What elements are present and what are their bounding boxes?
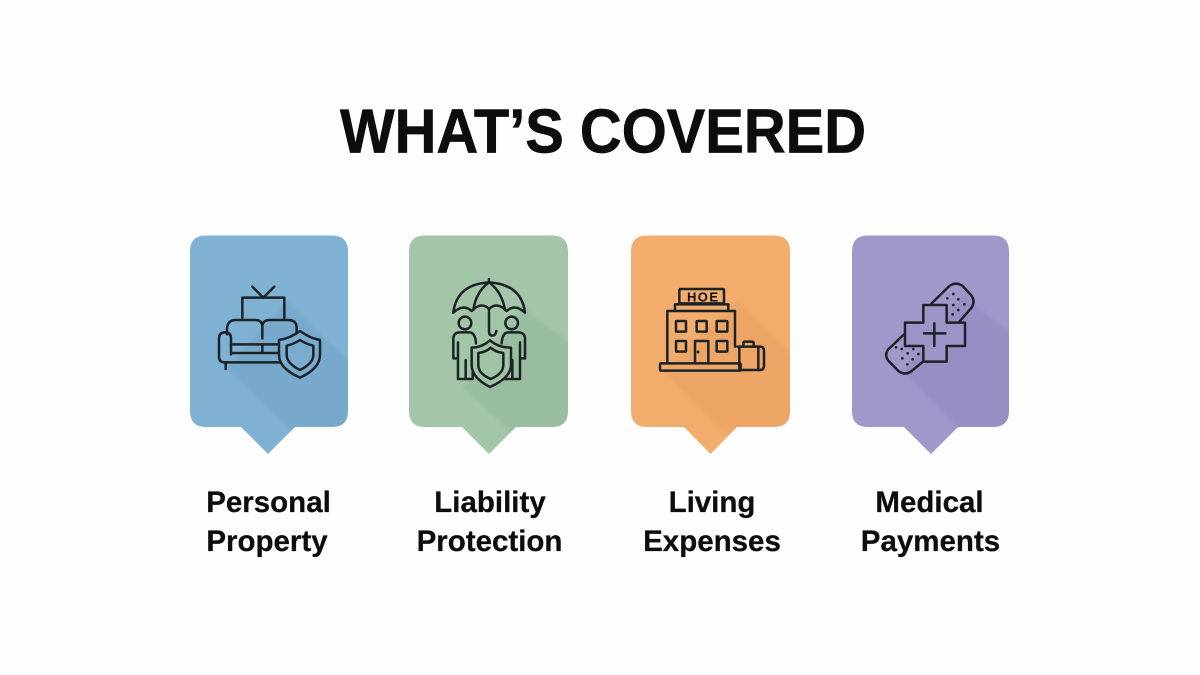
card background: blue [190, 235, 348, 455]
long shadow: green card [466, 312, 568, 430]
card background: purple [852, 235, 1009, 455]
icon: sofa, TV and shield [219, 287, 320, 378]
panel: medical payments [852, 235, 1013, 455]
card background: green [409, 235, 568, 455]
label: personal property: Personal [206, 486, 331, 519]
icon: hotel and suitcase [660, 289, 764, 371]
icon: door knob [696, 350, 700, 354]
label: medical payments: Payments [861, 525, 1000, 558]
long shadow: blue card [231, 306, 348, 429]
long shadow: purple card [907, 300, 1009, 427]
title: WHAT’S COVERED [340, 98, 866, 166]
label: personal property: Property [206, 525, 328, 558]
panel: living expenses [631, 235, 794, 455]
label: living expenses: Expenses [643, 525, 781, 558]
long shadow: orange card [663, 300, 794, 432]
card background: orange [631, 235, 790, 455]
icon: umbrella, two people and shield [453, 279, 525, 387]
label: liability protection: Liability [434, 486, 546, 519]
panel: personal property [190, 235, 352, 455]
icon: bandages and medical cross [886, 284, 973, 373]
label: living expenses: Living [669, 486, 755, 519]
label: medical payments: Medical [875, 486, 984, 519]
panel: liability protection [409, 235, 572, 455]
label: liability protection: Protection [417, 525, 562, 558]
hotel sign text: HOE [687, 290, 718, 304]
